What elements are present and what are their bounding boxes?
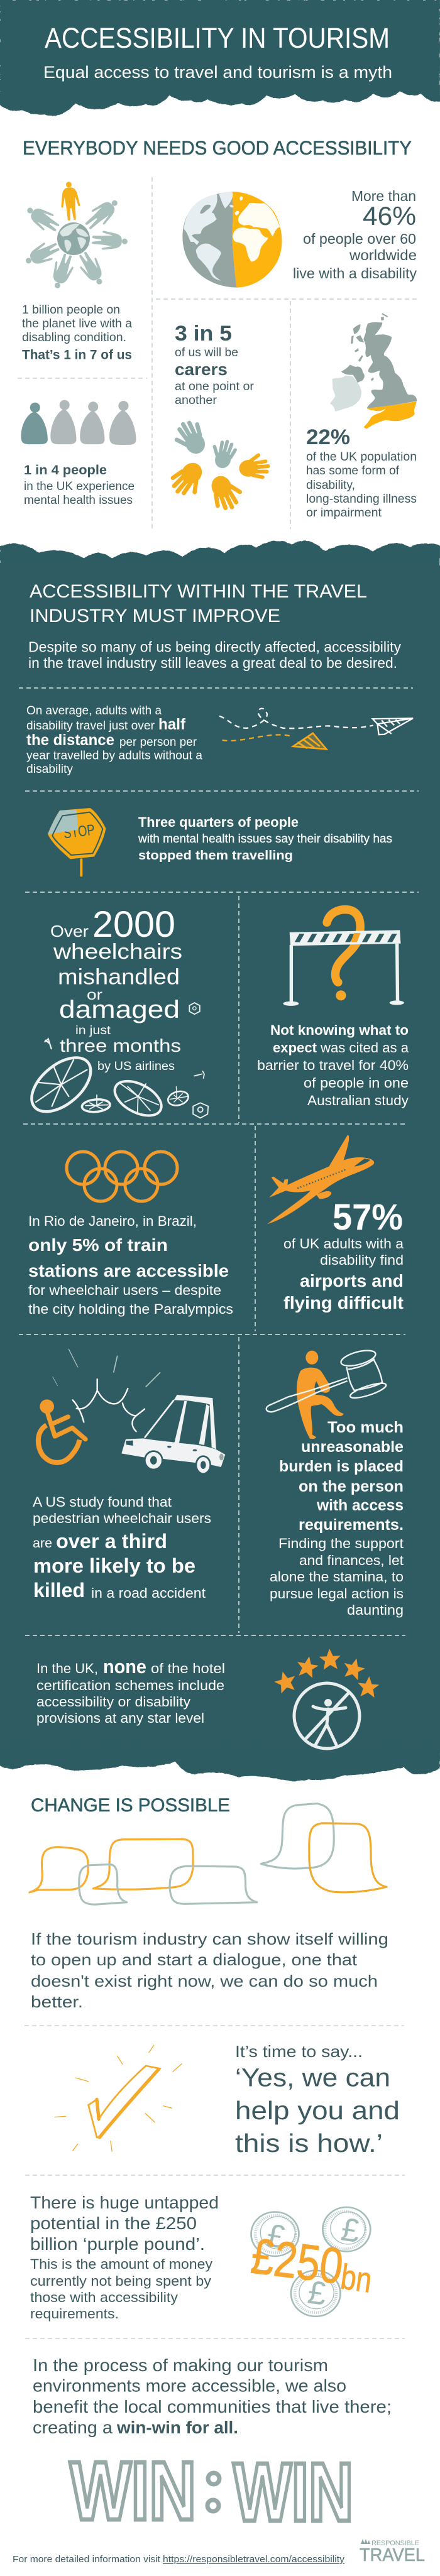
text: 22 percent: long-standing illness <box>306 493 417 506</box>
text: yes we can help you: It’s time to say... <box>235 2042 363 2061</box>
text: one billion people: 1 billion people on <box>22 303 120 317</box>
text: rio de janeiro: stations are accessible <box>28 1261 229 1280</box>
heading: everybody needs good accessibility: EVERYBODY NEEDS GOOD ACCESSIBILITY <box>23 136 412 159</box>
text: 46 percent: More than <box>351 188 416 204</box>
text: 57 percent: of UK adults with a <box>283 1236 404 1252</box>
heading: change is possible: CHANGE IS POSSIBLE <box>31 1795 230 1816</box>
header banner <box>0 0 440 116</box>
text: 57 percent: 57% <box>333 1197 403 1238</box>
text: unreasonable burden: Finding the support <box>278 1536 404 1551</box>
text: not knowing what to expect <box>257 1022 409 1108</box>
text: 3 in 5 carers: at one point or <box>175 380 255 393</box>
text: purple pound <box>30 2193 219 2322</box>
title: ACCESSIBILITY IN TOURISM <box>45 22 390 54</box>
footer source line <box>13 2554 345 2565</box>
text: three quarters of people: with mental health issues say their disability has <box>138 832 392 846</box>
text: hotel certification: In the UK, <box>36 1661 98 1676</box>
text: over 2000 wheelchairs: or <box>87 986 102 1003</box>
text: hotel certification <box>36 1656 225 1726</box>
text: tourism industry dialogue <box>31 1929 388 2011</box>
text: local communities benefit: creating a <box>33 2418 113 2437</box>
text: half the distance: per person per <box>119 736 197 749</box>
icon: question mark and barrier <box>283 910 404 1006</box>
text: tourism industry dialogue: doesn't exist right now, we can do so much <box>31 1972 378 1990</box>
heading: accessibility within the travel industry <box>30 581 367 626</box>
text: local communities benefit <box>33 2355 392 2437</box>
text: over 2000 wheelchairs: in just <box>75 1024 111 1037</box>
win win lettering: WIN <box>70 2445 196 2537</box>
text: unreasonable burden: daunting <box>347 1602 404 1618</box>
text: unreasonable burden: alone the stamina, to <box>270 1569 404 1585</box>
text: 57 percent: airports and <box>300 1271 404 1291</box>
icon: wheelchair and car collision <box>38 1349 225 1475</box>
intro text: in the travel industry still leaves a great deal to be desired. <box>28 655 397 671</box>
text: 22 percent: 22% <box>306 425 350 449</box>
icon: five stars and crossed-out person <box>272 1648 380 1749</box>
text: rio de janeiro: for wheelchair users – despite <box>28 1282 221 1298</box>
icon: person with giant gavel <box>267 1348 387 1439</box>
text: yes we can help you: help you and <box>235 2096 400 2125</box>
text: unreasonable burden: with access <box>316 1497 404 1514</box>
icon: speech bubbles <box>30 1804 387 1904</box>
heading: accessibility within the travel industry: ACCESSIBILITY WITHIN THE TRAVEL <box>30 581 367 602</box>
text: rio de janeiro: the city holding the Paralympics <box>28 1301 233 1317</box>
subtitle: Equal access to travel and tourism is a myth <box>43 63 392 82</box>
text: US study on wheelchair users: more likely to be <box>33 1554 195 1577</box>
text: not knowing what to expect: barrier to travel for 40% <box>257 1057 409 1073</box>
text: half the distance: the distance <box>26 731 114 749</box>
icon: coins with 250bn label: £ <box>305 2274 329 2313</box>
text: 22 percent: or impairment <box>306 506 382 520</box>
text: US study on wheelchair users: are <box>33 1536 52 1551</box>
text: one billion people <box>22 303 132 362</box>
text: 1 in 4 people <box>24 463 135 507</box>
text: US study on wheelchair users: over a third <box>56 1530 167 1553</box>
intro text <box>28 638 401 671</box>
icon: UK map <box>330 313 417 429</box>
text: hotel certification: accessibility or disability <box>36 1694 190 1710</box>
text: over 2000 wheelchairs: Over <box>50 922 89 941</box>
text: 57 percent: disability find <box>320 1252 404 1268</box>
text: 1 in 4 people: in the UK experience <box>24 480 135 493</box>
text: purple pound: There is huge untapped <box>30 2193 219 2212</box>
text: unreasonable burden: burden is placed <box>279 1458 404 1475</box>
dashed dividers: bottom section <box>25 2026 405 2339</box>
icon: five hands <box>168 418 268 512</box>
text: tourism industry dialogue: If the tourism industry can show itself willing <box>31 1929 388 1948</box>
icon: olympic rings <box>67 1152 177 1201</box>
text: 46 percent: worldwide <box>349 247 417 263</box>
icon: tick mark <box>55 2045 182 2151</box>
text: 1 in 4 people: mental health issues <box>24 494 133 507</box>
text: rio de janeiro: In Rio de Janeiro, in Brazil, <box>28 1213 197 1229</box>
text: three quarters of people: Three quarters of people <box>138 814 299 830</box>
icon: broken wheels and bolts <box>22 1003 208 1123</box>
icon: half-coloured globe <box>182 192 282 288</box>
text: US study on wheelchair users: killed <box>33 1579 85 1602</box>
text: half the distance: disability travel just over <box>26 719 155 733</box>
text: over 2000 wheelchairs: three months <box>60 1036 181 1056</box>
icon: four people, one highlighted <box>21 400 136 445</box>
text: purple pound: billion ‘purple pound’. <box>30 2234 205 2254</box>
text: over 2000 wheelchairs <box>50 904 182 1073</box>
text: 46 percent: live with a disability <box>293 265 417 281</box>
text: 46 percent: of people over 60 <box>303 231 416 247</box>
text: US study on wheelchair users <box>33 1494 211 1602</box>
text: half the distance <box>26 704 202 776</box>
text: one billion people: That’s 1 in 7 of us <box>22 348 132 362</box>
text: yes we can help you: this is how.’ <box>235 2129 383 2158</box>
text: local communities benefit: win-win for all. <box>116 2418 238 2437</box>
logo: responsible travel: TRAVEL <box>360 2545 425 2565</box>
text: not knowing what to expect: expect <box>273 1040 317 1056</box>
text: over 2000 wheelchairs: mishandled <box>58 965 180 989</box>
text: rio de janeiro: only 5% of train <box>28 1235 168 1255</box>
text: purple pound: potential in the £250 <box>30 2213 197 2233</box>
text: 57 percent <box>283 1197 404 1313</box>
text: not knowing what to expect: Not knowing what to <box>270 1022 409 1038</box>
text: 3 in 5 carers: of us will be <box>175 346 238 359</box>
icon: coins with 250bn label: £ <box>264 2217 289 2256</box>
text: hotel certification: provisions at any star level <box>36 1710 204 1726</box>
intro text: Despite so many of us being directly affected, accessibility <box>28 638 401 655</box>
text: 1 in 4 people: 1 in 4 people <box>24 463 107 478</box>
text: over 2000 wheelchairs: 2000 <box>92 904 175 945</box>
text: US study on wheelchair users: A US study found that <box>33 1494 172 1510</box>
icon: stop sign: STOP <box>62 821 96 842</box>
text: 22 percent: has some form of <box>306 464 400 478</box>
text: hotel certification: of the hotel <box>151 1661 225 1676</box>
text: unreasonable burden: pursue legal action is <box>270 1586 404 1602</box>
text: 3 in 5 carers: another <box>175 394 217 407</box>
win win lettering <box>70 2445 353 2538</box>
text: hotel certification: none <box>103 1656 146 1678</box>
text: 3 in 5 carers: 3 in 5 <box>175 322 232 346</box>
text: over 2000 wheelchairs: damaged <box>59 996 180 1023</box>
text: three quarters of people: stopped them travelling <box>138 849 293 863</box>
text: yes we can help you: ‘Yes, we can <box>235 2063 390 2092</box>
panel: dark travel industry section <box>0 541 440 1781</box>
text: not knowing what to expect: Australian study <box>307 1093 409 1108</box>
text: one billion people: the planet live with a <box>22 317 132 330</box>
text: unreasonable burden: Too much <box>327 1419 404 1436</box>
text: local communities benefit: In the process of making our tourism <box>33 2355 328 2375</box>
text: 46 percent: 46% <box>363 201 416 231</box>
text: half the distance: year travelled by adults without a <box>26 749 202 763</box>
text: not knowing what to expect: was cited as a <box>320 1040 409 1056</box>
text: yes we can help you <box>235 2042 400 2158</box>
text: half the distance: disability <box>26 763 73 776</box>
text: purple pound: This is the amount of money <box>30 2256 212 2272</box>
text: tourism industry dialogue: better. <box>31 1992 83 2011</box>
text: 22 percent <box>306 425 417 520</box>
text: half the distance: half <box>158 716 186 733</box>
text: three quarters of people <box>138 814 392 863</box>
text: over 2000 wheelchairs: by US airlines <box>97 1060 175 1073</box>
text: unreasonable burden: and finances, let <box>299 1553 404 1568</box>
icon: stop sign <box>48 808 106 875</box>
text: 57 percent: flying difficult <box>283 1293 404 1313</box>
text: 3 in 5 carers <box>175 322 255 407</box>
text: purple pound: requirements. <box>30 2306 119 2322</box>
text: hotel certification: certification schemes include <box>36 1678 224 1693</box>
text: unreasonable burden <box>270 1419 404 1618</box>
text: 22 percent: of the UK population <box>306 450 417 464</box>
icon: coins with 250bn label: £250 <box>248 2228 346 2295</box>
heading: accessibility within the travel industry: INDUSTRY MUST IMPROVE <box>30 606 280 626</box>
text: tourism industry dialogue: to open up and start a dialogue, one that <box>31 1950 358 1969</box>
icon: seven people around globe <box>22 181 128 291</box>
footer source line: https://responsibletravel.com/accessibility <box>163 2554 345 2565</box>
footer source line: For more detailed information visit <box>13 2554 161 2565</box>
text: US study on wheelchair users: pedestrian wheelchair users <box>33 1510 211 1526</box>
text: US study on wheelchair users: in a road accident <box>91 1585 206 1601</box>
text: unreasonable burden: unreasonable <box>301 1438 404 1456</box>
text: rio de janeiro <box>28 1213 233 1317</box>
text: unreasonable burden: requirements. <box>299 1516 404 1534</box>
text: unreasonable burden: on the person <box>299 1478 404 1495</box>
win win lettering: WIN <box>233 2446 353 2538</box>
icon: coins with 250bn label <box>248 2207 375 2317</box>
dashed dividers: dark section <box>19 688 419 1635</box>
text: purple pound: those with accessibility <box>30 2289 178 2305</box>
text: 22 percent: disability, <box>306 479 355 492</box>
logo: responsible travel: RESPONSIBLE <box>371 2540 419 2547</box>
icon: coins with 250bn label: £ <box>339 2211 362 2250</box>
text: purple pound: currently not being spent by <box>30 2273 211 2289</box>
text: local communities benefit: benefit the local communities that live there; <box>33 2397 392 2416</box>
text: over 2000 wheelchairs: wheelchairs <box>53 940 182 964</box>
icon: coins with 250bn label: bn <box>338 2256 375 2300</box>
text: 3 in 5 carers: carers <box>175 360 228 379</box>
text: not knowing what to expect: of people in one <box>304 1075 409 1091</box>
text: one billion people: disabling condition. <box>22 331 126 344</box>
dashed grid: top section <box>18 177 417 529</box>
text: 46 percent <box>293 188 417 281</box>
icon: paper planes <box>219 709 413 749</box>
text: half the distance: On average, adults with a <box>26 704 162 718</box>
icon: aeroplane <box>267 1135 374 1224</box>
text: local communities benefit: environments more accessible, we also <box>33 2376 346 2395</box>
